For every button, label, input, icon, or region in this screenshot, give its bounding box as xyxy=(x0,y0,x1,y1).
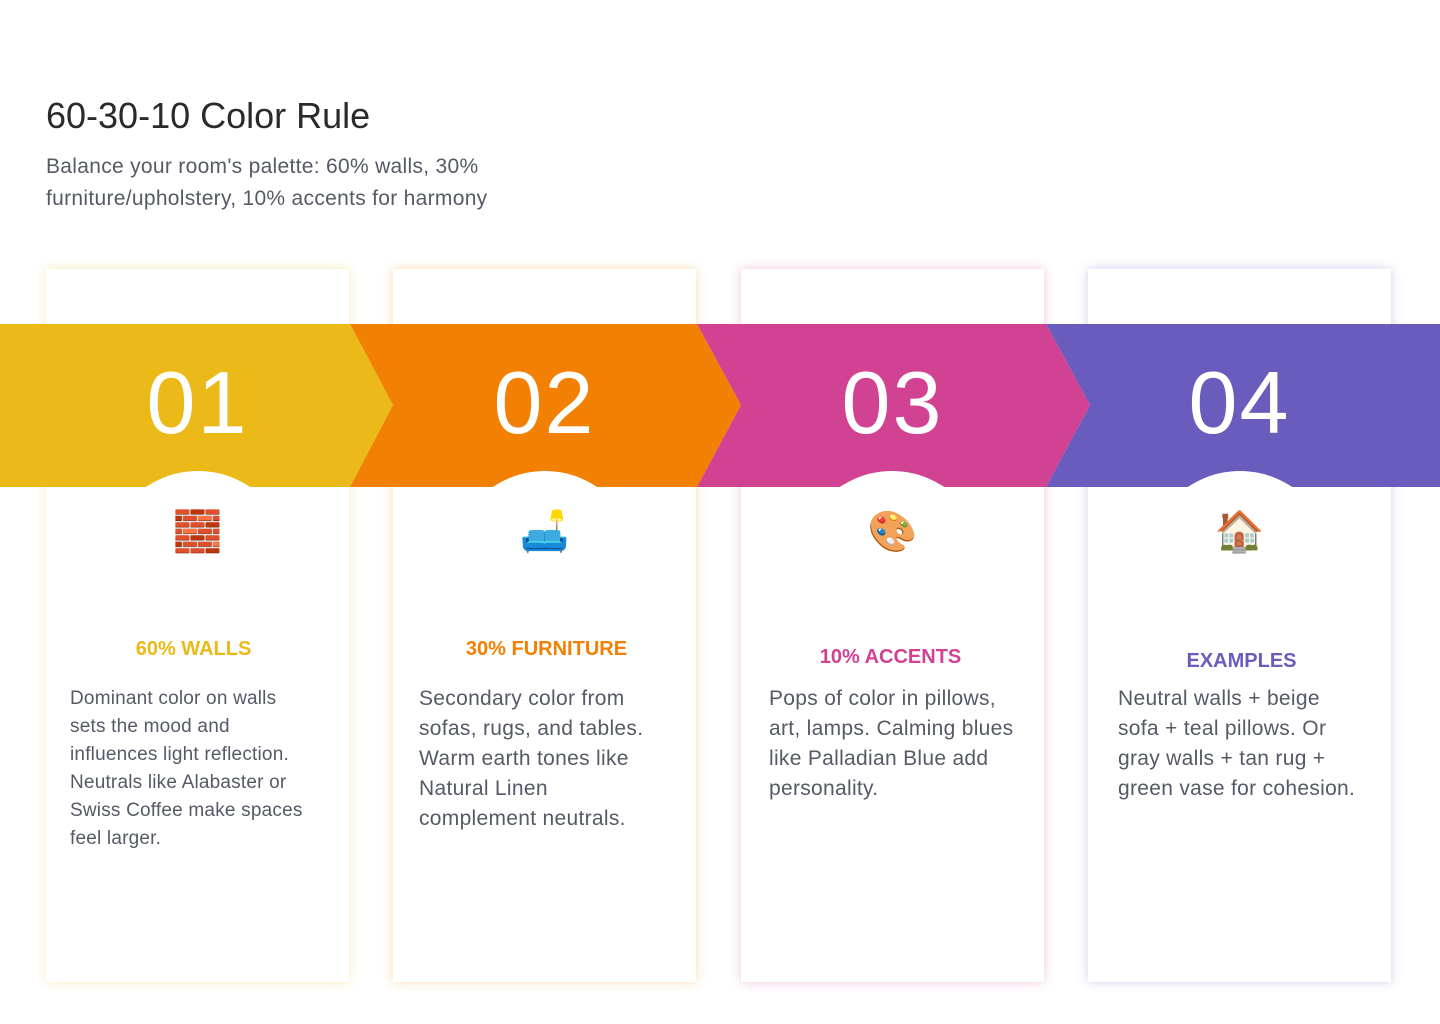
heading 1: 60% WALLS xyxy=(136,638,251,660)
text 4: Neutral walls + beige xyxy=(1118,687,1320,710)
icon: house: 🏠 xyxy=(1215,510,1264,554)
heading 4: EXAMPLES xyxy=(1186,650,1297,672)
heading 2: 30% FURNITURE xyxy=(466,638,627,660)
card 1 xyxy=(46,269,349,982)
title: 60-30-10 Color Rule xyxy=(46,95,370,136)
icon: sofa: 🛋️ xyxy=(520,510,569,554)
number 01: 01 xyxy=(147,353,248,452)
text 4: sofa + teal pillows. Or xyxy=(1118,717,1326,740)
number 04: 04 xyxy=(1189,353,1290,452)
number 02: 02 xyxy=(494,353,595,452)
card 2 xyxy=(393,269,696,982)
text 4: gray walls + tan rug + xyxy=(1118,747,1325,770)
text 4 xyxy=(1118,687,1355,800)
text 2: Secondary color from sofas, rugs, and tables. Warm earth tones like Natural Linen complement neutrals. xyxy=(419,687,643,830)
card 3 xyxy=(741,269,1044,982)
text 4: green vase for cohesion. xyxy=(1118,777,1355,800)
icon: palette: 🎨 xyxy=(868,510,917,554)
icon: brick: 🧱 xyxy=(173,510,222,554)
text 1: Dominant color on walls sets the mood and influences light reflection. Neutrals like Alabaster or Swiss Coffee make spaces feel larger. xyxy=(70,688,303,849)
card 4 xyxy=(1088,269,1391,982)
heading 3: 10% ACCENTS xyxy=(820,646,961,668)
subtitle: Balance your room's palette: 60% walls, 30% furniture/upholstery, 10% accents for harmony xyxy=(46,155,488,210)
text 3: Pops of color in pillows, art, lamps. Calming blues like Palladian Blue add personality. xyxy=(769,687,1013,800)
number 03: 03 xyxy=(842,353,943,452)
